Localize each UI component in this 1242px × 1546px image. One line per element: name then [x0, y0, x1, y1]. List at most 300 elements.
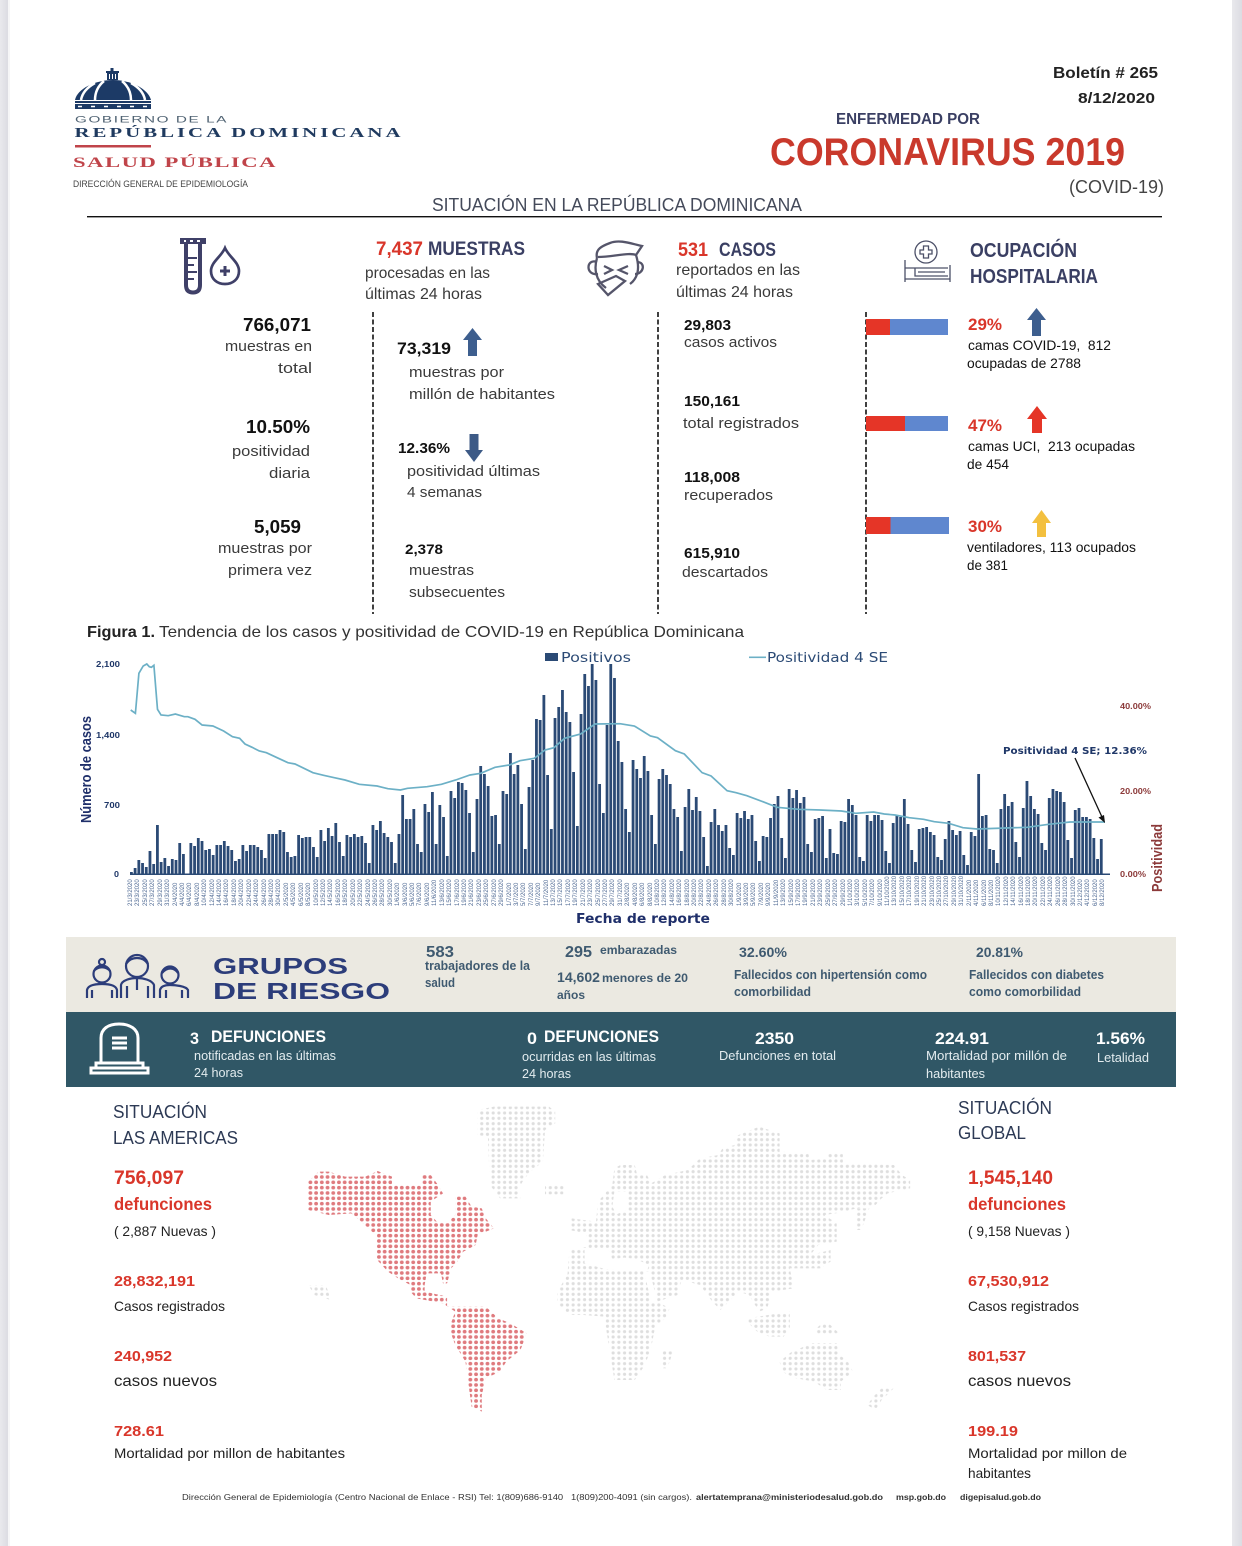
- stat: 0 defunciones: [522, 1027, 659, 1081]
- chart x axis date labels: 12/11/2020: [1004, 876, 1010, 906]
- chart x axis date labels: 24/5/2020: [366, 879, 372, 906]
- y axis cases: 700: [104, 800, 120, 810]
- bar: ventiladores 30%: [866, 517, 949, 534]
- panel: casos: [682, 317, 799, 581]
- chart x axis date labels: 1/7/2020: [507, 883, 513, 906]
- chart x axis date labels: 21/9/2020: [811, 879, 817, 906]
- stat: diabetes: como comorbilidad: [969, 985, 1081, 999]
- chart x axis date labels: 5/10/2020: [863, 879, 869, 906]
- chart x axis date labels: 27/9/2020: [833, 879, 839, 906]
- panel: muestras totales: muestras por: [218, 540, 312, 557]
- icon: arrow up: [463, 328, 482, 356]
- stat: hipertensión: [734, 944, 927, 999]
- footer contact: msp.gob.do: [896, 1492, 946, 1502]
- panel: ocupación hospitalaria: de 454: [967, 456, 1009, 472]
- bulletin number and date: 8/12/2020: [1078, 90, 1155, 107]
- stat: 0 defunciones: 24 horas: [522, 1066, 571, 1081]
- chart x axis date labels: 9/7/2020: [536, 883, 542, 906]
- panel: muestras totales: muestras en: [225, 338, 312, 355]
- chart x axis date labels: 29/9/2020: [840, 879, 846, 906]
- chart x axis date labels: 23/7/2020: [588, 879, 594, 906]
- heading: LAS AMERICAS: [113, 1127, 238, 1148]
- heading: SITUACIÓN: [958, 1097, 1052, 1118]
- panel: muestras totales: primera vez: [228, 562, 312, 579]
- panel: casos: total registrados: [683, 415, 799, 432]
- chart x axis date labels: 23/3/2020: [135, 879, 141, 906]
- panel: situación global: Casos registrados: [968, 1298, 1079, 1314]
- chart x axis date labels: 14/8/2020: [670, 879, 676, 906]
- chart x axis date labels: 22/4/2020: [247, 879, 253, 906]
- icon: arrow down: [465, 434, 483, 462]
- chart x axis date labels: 8/12/2020: [1100, 879, 1106, 906]
- panel: situación las américas: defunciones: [114, 1194, 212, 1214]
- panel: casos: 150,161: [684, 393, 740, 410]
- chart x axis date labels: 14/11/2020: [1011, 876, 1017, 906]
- y axis title positivity: Positividad: [1149, 824, 1166, 892]
- chart x axis date labels: 18/4/2020: [232, 879, 238, 906]
- chart x axis date labels: 15/10/2020: [900, 876, 906, 906]
- stat: total: 2350: [755, 1029, 794, 1048]
- y axis cases: 0: [114, 869, 119, 879]
- chart x axis date labels: 4/4/2020: [180, 883, 186, 906]
- chart x axis date labels: 19/10/2020: [915, 876, 921, 906]
- panel: muestras totales: total: [278, 360, 312, 377]
- icon: tombstone: [91, 1024, 148, 1073]
- text: gobierno de la: GOBIERNO DE LA: [75, 114, 228, 126]
- chart x axis date labels: 25/9/2020: [826, 879, 832, 906]
- bulletin number and date: [1053, 65, 1158, 107]
- panel: ocupación hospitalaria: ocupadas de 2788: [967, 355, 1081, 371]
- figure caption: Tendencia de los casos y positividad de COVID-19 en República Dominicana: [159, 624, 744, 641]
- stat: embarazadas y menores: [557, 943, 688, 1002]
- header: ocupación hospitalaria: [970, 238, 1098, 288]
- chart x axis date labels: 7/6/2020: [417, 883, 423, 906]
- bulletin number and date: Boletín # 265: [1053, 65, 1158, 82]
- chart x axis date labels: 7/9/2020: [759, 883, 765, 906]
- stat: diabetes: 20.81%: [976, 944, 1024, 960]
- chart x axis date labels: 13/6/2020: [440, 879, 446, 906]
- panel: casos: recuperados: [684, 487, 773, 504]
- chart x axis date labels: 21/10/2020: [922, 876, 928, 906]
- chart x axis date labels: 2/12/2020: [1078, 879, 1084, 906]
- header: muestras: [365, 239, 525, 303]
- heading: [958, 1097, 1052, 1143]
- chart x axis date labels: 17/7/2020: [566, 879, 572, 906]
- chart: casos y positividad: [78, 651, 1166, 927]
- panel: ocupación hospitalaria: camas COVID-19, 812: [968, 337, 1111, 353]
- icon: hospital bed: [905, 241, 950, 282]
- chart x axis date labels: 28/8/2020: [722, 879, 728, 906]
- chart x axis date labels: 3/10/2020: [855, 879, 861, 906]
- stat: 3 defunciones: DEFUNCIONES: [211, 1027, 326, 1046]
- chart x axis date labels: 9/10/2020: [878, 879, 884, 906]
- chart x axis date labels: 10/11/2020: [996, 876, 1002, 906]
- stat: diabetes: Fallecidos con diabetes: [969, 968, 1104, 982]
- chart x axis date labels: 5/6/2020: [410, 883, 416, 906]
- chart x axis date labels: 3/6/2020: [403, 883, 409, 906]
- header: casos: CASOS: [719, 240, 776, 261]
- panel: muestras totales: [218, 315, 312, 579]
- y axis positivity: [1120, 701, 1151, 879]
- stat: 3 defunciones: 24 horas: [194, 1065, 243, 1080]
- chart x axis date labels: 28/11/2020: [1063, 876, 1069, 906]
- stat: 0 defunciones: 0: [527, 1029, 537, 1048]
- chart x axis date labels: 17/6/2020: [455, 879, 461, 906]
- y axis title: Número de casos: [78, 716, 95, 823]
- chart x axis date labels: 18/8/2020: [685, 879, 691, 906]
- stat: trabajadores de la salud: [425, 944, 531, 990]
- header: casos: 531: [678, 240, 708, 261]
- stat: hipertensión: 32.60%: [739, 944, 788, 960]
- chart x axis date labels: 16/4/2020: [224, 879, 230, 906]
- chart x axis date labels: 28/5/2020: [380, 879, 386, 906]
- chart x axis date labels: 29/6/2020: [499, 879, 505, 906]
- figure caption: Figura 1.: [87, 624, 155, 641]
- panel: situación global: ( 9,158 Nuevas ): [968, 1223, 1070, 1239]
- bar: camas uci 47%: [866, 416, 948, 431]
- stat: mortalidad: 224.91: [935, 1029, 989, 1048]
- stat: trabajadores de la salud: salud: [425, 976, 455, 990]
- panel: muestras por millón: subsecuentes: [409, 584, 505, 601]
- stat: 3 defunciones: [190, 1027, 336, 1080]
- chart x axis date labels: 19/9/2020: [803, 879, 809, 906]
- chart x axis date labels: 14/4/2020: [217, 879, 223, 906]
- chart x axis date labels: 19/6/2020: [462, 879, 468, 906]
- chart x axis date labels: 23/10/2020: [930, 876, 936, 906]
- chart x axis date labels: 15/6/2020: [447, 879, 453, 906]
- panel: situación las américas: ( 2,887 Nuevas ): [114, 1223, 216, 1239]
- heading: grupos de riesgo: DE RIESGO: [213, 978, 390, 1004]
- panel: situación las américas: 756,097: [114, 1168, 184, 1189]
- header: casos: últimas 24 horas: [676, 284, 793, 301]
- chart x axis date labels: 20/5/2020: [351, 879, 357, 906]
- panel: casos: 615,910: [684, 545, 740, 562]
- chart x axis date labels: 17/9/2020: [796, 879, 802, 906]
- panel: muestras por millón: muestras por: [409, 364, 504, 381]
- panel: situación global: 67,530,912: [968, 1273, 1049, 1290]
- panel: muestras totales: 5,059: [254, 517, 301, 537]
- chart x axis date labels: 2/5/2020: [284, 883, 290, 906]
- chart x axis date labels: 16/8/2020: [677, 879, 683, 906]
- panel: situación global: defunciones: [968, 1194, 1066, 1214]
- chart x axis date labels: 16/11/2020: [1019, 876, 1025, 906]
- panel: situación global: casos nuevos: [968, 1373, 1071, 1390]
- chart x axis date labels: 4/8/2020: [633, 883, 639, 906]
- y axis cases: [96, 659, 120, 879]
- heading: grupos de riesgo: GRUPOS: [213, 953, 348, 979]
- chart x axis date labels: 24/11/2020: [1048, 876, 1054, 906]
- chart x axis date labels: 8/11/2020: [989, 880, 995, 906]
- chart x axis date labels: 5/7/2020: [521, 883, 527, 906]
- heading: [113, 1101, 238, 1148]
- panel: muestras por millón: muestras: [409, 562, 474, 579]
- panel: ocupación hospitalaria: 47%: [968, 416, 1002, 435]
- chart x axis date labels: 31/7/2020: [618, 879, 624, 906]
- chart x axis date labels: 11/7/2020: [544, 880, 550, 906]
- chart x axis date labels: 31/10/2020: [959, 876, 965, 906]
- stat: mortalidad: Mortalidad por millón de: [926, 1048, 1067, 1063]
- legend: Positividad 4 SE: [767, 651, 888, 666]
- chart x axis date labels: 27/6/2020: [492, 879, 498, 906]
- panel: ocupación hospitalaria: camas UCI, 213 ocupadas: [968, 438, 1135, 454]
- heading: GLOBAL: [958, 1122, 1026, 1143]
- stat: trabajadores de la salud: 583: [426, 944, 454, 961]
- panel: situación las américas: casos nuevos: [114, 1373, 217, 1390]
- chart x axis date labels: 12/4/2020: [210, 879, 216, 906]
- header: casos: [676, 240, 800, 301]
- title: [770, 111, 1164, 197]
- panel: muestras por millón: 2,378: [405, 541, 443, 557]
- chart x axis date labels: 30/5/2020: [388, 879, 394, 906]
- chart x axis date labels: 25/6/2020: [484, 879, 490, 906]
- panel: situación las américas: 28,832,191: [114, 1273, 195, 1290]
- stat: 3 defunciones: notificadas en las últimas: [194, 1048, 336, 1063]
- stat: hipertensión: Fallecidos con hipertensión como: [734, 968, 927, 982]
- stat: mortalidad: habitantes: [926, 1066, 985, 1081]
- stat: letalidad: 1.56%: [1096, 1029, 1145, 1048]
- stat: embarazadas y menores: embarazadas: [600, 943, 677, 957]
- chart x axis date labels: 29/7/2020: [610, 879, 616, 906]
- panel: casos: 29,803: [684, 317, 731, 334]
- chart x axis date labels: 21/3/2020: [128, 879, 134, 906]
- chart x axis date labels: 6/5/2020: [299, 883, 305, 906]
- legend: Positivos: [561, 651, 631, 666]
- chart x axis date labels: 10/8/2020: [655, 879, 661, 906]
- chart x axis date labels: 3/9/2020: [744, 883, 750, 906]
- chart x axis date labels: 13/9/2020: [781, 879, 787, 906]
- icon: arrow up red: [1027, 406, 1047, 433]
- header: muestras: procesadas en las: [365, 265, 490, 282]
- chart x axis date labels: 9/9/2020: [766, 883, 772, 906]
- panel: grupos de riesgo: [66, 937, 1176, 1012]
- legend: [545, 651, 888, 666]
- header: ocupación hospitalaria: OCUPACIÓN: [970, 238, 1077, 262]
- chart x axis date labels: 1/10/2020: [848, 879, 854, 906]
- panel: situación las américas: 728.61: [114, 1423, 164, 1440]
- stat: letalidad: [1096, 1029, 1149, 1065]
- panel: muestras por millón: 4 semanas: [407, 484, 482, 501]
- chart x axis date labels: 10/5/2020: [314, 879, 320, 906]
- chart x axis date labels: 29/3/2020: [158, 879, 164, 906]
- chart x axis date labels: 22/8/2020: [699, 879, 705, 906]
- title: CORONAVIRUS 2019: [770, 131, 1125, 174]
- header: casos: reportados en las: [676, 262, 800, 279]
- chart x axis date labels: 18/5/2020: [343, 879, 349, 906]
- chart x axis date labels: 19/7/2020: [573, 879, 579, 906]
- map: seas cut out: [585, 1192, 657, 1302]
- stat: embarazadas y menores: menores de 20: [602, 971, 688, 985]
- panel: muestras por millón: 12.36%: [398, 440, 450, 457]
- chart x axis date labels: 18/11/2020: [1026, 876, 1032, 906]
- chart x axis date labels: 4/5/2020: [291, 883, 297, 906]
- chart x axis date labels: 8/8/2020: [648, 883, 654, 906]
- y axis cases: 1,400: [96, 730, 120, 740]
- chart x axis date labels: 9/6/2020: [425, 883, 431, 906]
- stat: diabetes: [969, 944, 1104, 999]
- panel: muestras totales: 10.50%: [246, 417, 310, 437]
- panel: muestras totales: diaria: [269, 465, 311, 482]
- title: ENFERMEDAD POR: [836, 111, 980, 128]
- callout: positividad 12.36%: [1003, 746, 1148, 823]
- stat: hipertensión: comorbilidad: [734, 985, 811, 999]
- chart x axis date labels: 27/3/2020: [150, 879, 156, 906]
- panel: situación global: Mortalidad por millon de: [968, 1445, 1127, 1461]
- chart x axis date labels: 12/8/2020: [662, 879, 668, 906]
- chart x axis date labels: 6/8/2020: [640, 883, 646, 906]
- panel: ocupación hospitalaria: de 381: [967, 557, 1008, 573]
- chart x axis date labels: 15/7/2020: [558, 879, 564, 906]
- panel: situación las américas: Casos registrados: [114, 1298, 225, 1314]
- icon: arrow up yellow: [1032, 510, 1051, 537]
- panel: ocupación hospitalaria: [866, 308, 1136, 573]
- heading: grupos de riesgo: [213, 953, 390, 1004]
- chart x axis date labels: 22/5/2020: [358, 879, 364, 906]
- x axis title: Fecha de reporte: [576, 911, 710, 927]
- stat: total: [719, 1029, 836, 1063]
- panel: situación global: 199.19: [968, 1423, 1018, 1440]
- chart x axis date labels: 3/7/2020: [514, 883, 520, 906]
- chart x axis date labels: 22/11/2020: [1041, 876, 1047, 906]
- map: rest of the world: [308, 1107, 910, 1410]
- icon: dome: [75, 68, 151, 109]
- chart x axis date labels: 11/10/2020: [885, 876, 891, 906]
- header: ocupación hospitalaria: HOSPITALARIA: [970, 266, 1098, 288]
- chart x axis date labels: 2/8/2020: [625, 883, 631, 906]
- chart x axis date labels: 14/5/2020: [328, 879, 334, 906]
- chart x axis date labels: 13/7/2020: [551, 879, 557, 906]
- panel: casos: 118,008: [684, 469, 740, 486]
- chart x axis date labels: 30/8/2020: [729, 879, 735, 906]
- chart x axis date labels: 29/10/2020: [952, 876, 958, 906]
- panel: casos: descartados: [682, 564, 768, 581]
- panel: muestras totales: positividad: [232, 443, 310, 460]
- icon: people: [87, 955, 188, 998]
- chart x axis date labels: 4/12/2020: [1085, 879, 1091, 906]
- chart x axis date labels: 13/10/2020: [892, 876, 898, 906]
- chart x axis date labels: 7/7/2020: [529, 883, 535, 906]
- chart x axis date labels: 1/6/2020: [395, 883, 401, 906]
- footer contact: [182, 1492, 1041, 1502]
- chart x axis date labels: 12/5/2020: [321, 879, 327, 906]
- stat: total: Defunciones en total: [719, 1048, 836, 1063]
- panel: situación global: [958, 1097, 1127, 1481]
- header: muestras: últimas 24 horas: [365, 286, 482, 303]
- heading: SITUACIÓN: [113, 1101, 207, 1122]
- bars: positivos: [131, 664, 1101, 874]
- chart x axis date labels: 23/9/2020: [818, 879, 824, 906]
- icon: test tube and drop: [180, 238, 239, 292]
- stat: 3 defunciones: 3: [190, 1029, 199, 1048]
- chart x axis date labels: 8/5/2020: [306, 883, 312, 906]
- chart x axis date labels: 11/9/2020: [774, 880, 780, 906]
- chart x axis date labels: 21/6/2020: [469, 879, 475, 906]
- chart x axis date labels: 27/7/2020: [603, 879, 609, 906]
- bar: camas covid 29%: [866, 319, 948, 335]
- panel: ocupación hospitalaria: 29%: [968, 315, 1002, 334]
- chart x axis date labels: 8/4/2020: [195, 883, 201, 906]
- panel: ocupación hospitalaria: 30%: [968, 517, 1002, 536]
- text: dirección general: DIRECCIÓN GENERAL DE EPIDEMIOLOGÍA: [73, 179, 249, 190]
- chart x axis date labels: 4/11/2020: [974, 880, 980, 906]
- chart x axis date labels: 30/11/2020: [1071, 876, 1077, 906]
- chart x axis date labels: 2/4/2020: [173, 883, 179, 906]
- chart x axis date labels: 20/8/2020: [692, 879, 698, 906]
- panel: situación global: 1,545,140: [968, 1168, 1053, 1189]
- chart x axis date labels: 26/4/2020: [262, 879, 268, 906]
- chart x axis date labels: 5/9/2020: [751, 883, 757, 906]
- chart x axis date labels: [128, 876, 1106, 906]
- chart x axis date labels: 20/4/2020: [239, 879, 245, 906]
- title: (COVID-19): [1069, 177, 1164, 197]
- text: república dominicana: REPÚBLICA DOMINICANA: [74, 124, 404, 141]
- logo: gobierno / salud pública: [73, 68, 404, 190]
- stat: embarazadas y menores: años: [557, 988, 585, 1002]
- chart x axis date labels: 10/4/2020: [202, 879, 208, 906]
- header: muestras: 7,437: [376, 239, 423, 260]
- footer contact: Dirección General de Epidemiología (Centro Nacional de Enlace - RSI) Tel: 1(809)686-9140 1(809)200-4091 (sin cargos).: [182, 1492, 692, 1502]
- chart x axis date labels: 23/6/2020: [477, 879, 483, 906]
- panel: defunciones: [66, 1012, 1176, 1087]
- y axis positivity: 0.00%: [1120, 869, 1146, 879]
- chart x axis date labels: 31/3/2020: [165, 879, 171, 906]
- stat: embarazadas y menores: 295: [565, 944, 592, 961]
- panel: muestras por millón: [397, 328, 555, 601]
- heading: situación en la república dominicana: SITUACIÓN EN LA REPÚBLICA DOMINICANA: [432, 194, 802, 215]
- dotted world map: [308, 1107, 910, 1412]
- panel: ocupación hospitalaria: ventiladores, 113 ocupados: [967, 539, 1136, 555]
- chart x axis date labels: 11/6/2020: [432, 880, 438, 906]
- chart x axis date labels: 6/12/2020: [1093, 879, 1099, 906]
- text: salud pública: SALUD PÚBLICA: [73, 154, 277, 171]
- icon: face with mask: [588, 241, 643, 295]
- chart x axis date labels: 24/4/2020: [254, 879, 260, 906]
- panel: muestras por millón: 73,319: [397, 339, 451, 358]
- stat: trabajadores de la salud: trabajadores de la: [425, 959, 531, 973]
- footer contact: digepisalud.gob.do: [960, 1492, 1041, 1502]
- stat: 0 defunciones: ocurridas en las últimas: [522, 1049, 656, 1064]
- footer contact: alertatemprana@ministeriodesalud.gob.do: [696, 1492, 883, 1502]
- stat: embarazadas y menores: 14,602: [557, 969, 600, 985]
- chart x axis date labels: 21/7/2020: [581, 879, 587, 906]
- panel: situación global: habitantes: [968, 1465, 1031, 1481]
- chart x axis date labels: 25/10/2020: [937, 876, 943, 906]
- chart x axis date labels: 26/11/2020: [1056, 876, 1062, 906]
- panel: muestras por millón: millón de habitantes: [409, 386, 555, 403]
- chart x axis date labels: 27/10/2020: [944, 876, 950, 906]
- panel: situación las américas: [113, 1101, 345, 1461]
- panel: muestras por millón: positividad últimas: [407, 463, 540, 480]
- chart x axis date labels: 2/11/2020: [967, 880, 973, 906]
- chart x axis date labels: 7/10/2020: [870, 879, 876, 906]
- panel: situación global: 801,537: [968, 1348, 1026, 1365]
- line: positividad 4 SE: [131, 664, 1105, 829]
- chart x axis date labels: 25/7/2020: [596, 879, 602, 906]
- chart x axis date labels: 1/9/2020: [737, 883, 743, 906]
- chart x axis date labels: 28/4/2020: [269, 879, 275, 906]
- panel: situación las américas: Mortalidad por millon de habitantes: [114, 1445, 345, 1461]
- callout: positividad 12.36%: Positividad 4 SE; 12.36%: [1003, 746, 1148, 757]
- chart x axis date labels: 16/5/2020: [336, 879, 342, 906]
- chart x axis date labels: 30/4/2020: [276, 879, 282, 906]
- chart x axis date labels: 20/11/2020: [1033, 876, 1039, 906]
- chart x axis date labels: 6/4/2020: [187, 883, 193, 906]
- chart x axis date labels: 24/8/2020: [707, 879, 713, 906]
- icon: arrow up blue: [1027, 308, 1046, 336]
- stat: 0 defunciones: DEFUNCIONES: [544, 1027, 659, 1046]
- panel: casos: casos activos: [684, 334, 777, 351]
- chart x axis date labels: 6/11/2020: [982, 880, 988, 906]
- header: muestras: MUESTRAS: [428, 239, 525, 260]
